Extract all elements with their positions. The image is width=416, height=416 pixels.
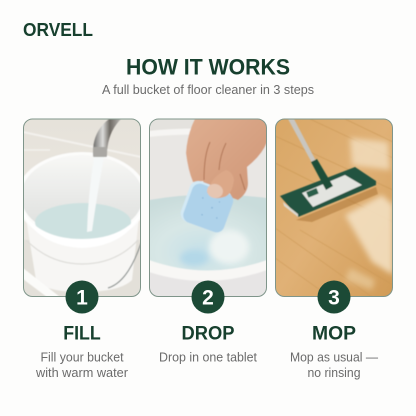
step badge 2 bbox=[192, 280, 224, 314]
step badge 3 bbox=[318, 280, 350, 314]
brand logo: ORVELL: ORVELL bbox=[23, 20, 93, 40]
step badge 1: 1 bbox=[76, 286, 88, 310]
panel border bbox=[150, 119, 266, 296]
panel border bbox=[24, 119, 140, 296]
heading: DROP: DROP bbox=[182, 324, 235, 344]
panel: fill step bbox=[23, 118, 141, 297]
subtitle: A full bucket of floor cleaner in 3 steps bbox=[102, 82, 314, 97]
description: mop: no rinsing bbox=[308, 366, 361, 380]
description: fill: Fill your bucket bbox=[40, 350, 124, 364]
panel: drop step bbox=[149, 119, 267, 297]
description: fill: with warm water bbox=[35, 366, 128, 380]
description: drop: Drop in one tablet bbox=[159, 350, 258, 364]
description: fill bbox=[35, 350, 128, 380]
description: mop: Mop as usual — bbox=[290, 350, 378, 364]
description: mop bbox=[290, 350, 378, 380]
step badge 1 bbox=[66, 280, 98, 314]
step badge 3: 3 bbox=[328, 286, 340, 310]
step badge 2: 2 bbox=[202, 286, 214, 310]
heading: MOP: MOP bbox=[312, 324, 356, 344]
photo: bucket under a running faucet bbox=[24, 120, 140, 296]
title: HOW IT WORKS bbox=[126, 54, 290, 80]
heading: FILL: FILL bbox=[63, 324, 101, 344]
photo: flat mop on a shiny wood floor bbox=[275, 119, 393, 297]
panel border bbox=[276, 119, 392, 296]
photo: hand dropping a tablet into water bbox=[149, 119, 267, 297]
panel: mop step bbox=[275, 119, 393, 297]
